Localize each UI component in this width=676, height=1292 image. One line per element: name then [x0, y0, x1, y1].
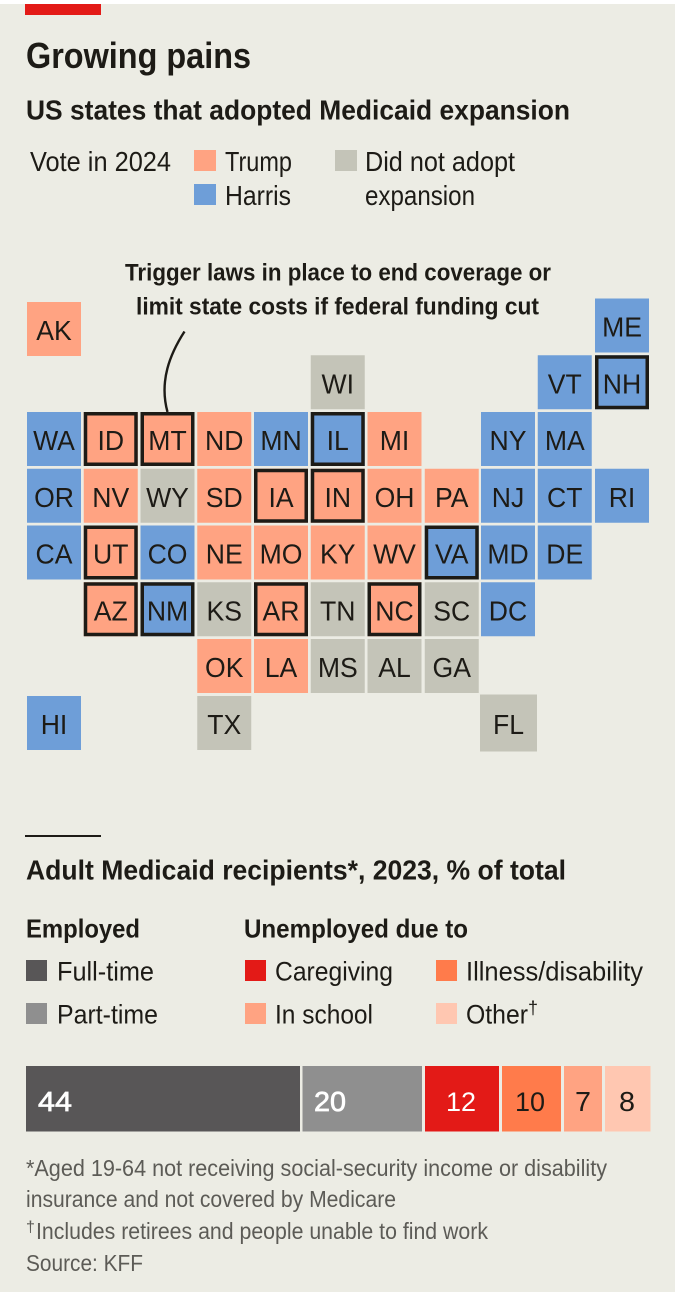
state: MN: MN	[260, 424, 302, 456]
state: DC: DC	[489, 595, 527, 626]
state: MN	[254, 412, 308, 466]
footnotes and source: insurance and not covered by Medicare	[26, 1186, 396, 1212]
state: MD: MD	[487, 538, 529, 570]
legend: unemployed due to: Unemployed due to	[244, 914, 468, 944]
state: UT: UT	[93, 538, 129, 570]
state: SC: SC	[433, 595, 470, 626]
state: NC	[368, 582, 422, 636]
state: PA: PA	[435, 481, 469, 513]
state: MS: MS	[318, 651, 358, 683]
state: FL	[480, 694, 537, 752]
state: IN	[311, 469, 365, 523]
state: MO: MO	[260, 538, 302, 570]
state: ME	[595, 298, 649, 352]
state: HI: HI	[41, 708, 67, 740]
state: RI: RI	[609, 481, 635, 513]
legend: employed: Full-time	[57, 956, 154, 986]
state: LA: LA	[265, 651, 298, 683]
state: NV: NV	[92, 481, 130, 513]
segment: caregiving 12: 12	[446, 1087, 476, 1117]
state: MO	[254, 526, 308, 580]
state: ID: ID	[97, 424, 124, 456]
segment: caregiving 12	[425, 1066, 499, 1132]
state: KY: KY	[320, 538, 355, 570]
state: NY	[481, 412, 535, 466]
state: DC	[481, 582, 535, 636]
footnotes and source: Includes retirees and people unable to find work	[36, 1218, 488, 1244]
state: WI: WI	[322, 368, 354, 399]
annotation leader line	[165, 332, 184, 412]
segment: illness 10: 10	[515, 1087, 545, 1117]
state: IL	[311, 412, 365, 466]
state: SC	[425, 582, 479, 636]
state: MA: MA	[545, 424, 585, 456]
state: RI	[595, 469, 649, 523]
state: WI	[311, 355, 365, 409]
footnotes and source: Source: KFF	[26, 1250, 143, 1276]
state: CO	[140, 526, 194, 580]
state: ND: ND	[205, 424, 243, 456]
state: OH: OH	[375, 481, 414, 513]
segment: other 8	[605, 1066, 650, 1132]
legend: employed	[26, 914, 158, 1030]
state: NV	[84, 469, 138, 523]
state: ID	[84, 412, 138, 466]
state: CA	[27, 526, 81, 580]
legend: unemployed due to: In school	[275, 1000, 373, 1030]
state: OK: OK	[205, 651, 243, 683]
state: CT	[538, 469, 592, 523]
legend: unemployed due to: Other	[466, 1000, 528, 1030]
legend: employed: Part-time	[57, 1000, 158, 1030]
state: TN	[311, 582, 365, 636]
legend: vote in 2024: Did not adopt	[365, 146, 515, 177]
state: MT	[140, 412, 194, 466]
state: GA	[425, 639, 479, 693]
red tab	[25, 4, 101, 15]
state: KS	[197, 582, 251, 636]
state: OR: OR	[34, 481, 74, 513]
state: AK: AK	[36, 314, 72, 346]
segment: in school 7	[564, 1066, 602, 1132]
segment: in school 7: 7	[575, 1086, 591, 1117]
state: FL: FL	[493, 708, 524, 740]
state: MI: MI	[380, 424, 409, 456]
annotation: trigger laws: limit state costs if federal funding cut	[136, 294, 539, 320]
legend: vote in 2024: Harris	[225, 180, 291, 211]
footnotes and source	[26, 1155, 607, 1276]
legend: vote in 2024: expansion	[365, 180, 475, 211]
state: VT: VT	[548, 368, 582, 399]
state: NH	[595, 355, 649, 409]
state: NM	[140, 582, 194, 636]
state: OK	[197, 639, 251, 693]
tile map of US states	[27, 298, 649, 752]
state: NH: NH	[603, 368, 641, 399]
state: WA	[27, 412, 81, 466]
state: IA: IA	[268, 481, 294, 513]
state: AL: AL	[378, 651, 411, 683]
state: HI	[27, 696, 81, 750]
state: WY	[140, 469, 194, 523]
footnotes and source: †	[26, 1219, 35, 1236]
state: NE	[197, 526, 251, 580]
segment: other 8: 8	[619, 1086, 635, 1117]
state: NY: NY	[490, 424, 526, 456]
second chart heading: Adult Medicaid recipients*, 2023, % of total	[26, 854, 566, 886]
state: DE	[538, 526, 592, 580]
legend: employed: Employed	[26, 914, 140, 944]
legend: unemployed due to: Caregiving	[275, 956, 393, 986]
state: SD: SD	[206, 481, 243, 513]
subtitle: US states that adopted Medicaid expansion	[26, 94, 570, 126]
legend: unemployed due to: †	[528, 998, 538, 1018]
state: ME: ME	[602, 311, 642, 343]
state: VT	[538, 355, 592, 409]
state: WA: WA	[33, 424, 76, 456]
stacked bar chart	[26, 1066, 650, 1132]
footnotes and source: *Aged 19-64 not receiving social-security income or disability	[26, 1155, 607, 1181]
state: AK	[27, 302, 81, 356]
state: NM: NM	[147, 595, 188, 626]
state: SD	[197, 469, 251, 523]
state: DE: DE	[546, 538, 583, 570]
state: MA	[538, 412, 592, 466]
state: WY: WY	[146, 481, 189, 513]
state: ND	[197, 412, 251, 466]
state: MI	[368, 412, 422, 466]
state: WV	[368, 526, 422, 580]
state: TN: TN	[320, 595, 355, 626]
state: LA	[254, 639, 308, 693]
state: MT: MT	[148, 424, 187, 456]
state: VA	[425, 526, 479, 580]
legend: vote in 2024: Vote in 2024	[30, 146, 171, 177]
segment: illness 10	[502, 1066, 561, 1132]
annotation: trigger laws: Trigger laws in place to end coverage or	[125, 260, 551, 286]
state: KS: KS	[207, 595, 242, 626]
state: MS	[311, 639, 365, 693]
state: IL: IL	[327, 424, 349, 456]
state: IA	[254, 469, 308, 523]
state: NE: NE	[206, 538, 243, 570]
segment: full-time 44: 44	[38, 1086, 72, 1117]
state: GA: GA	[433, 651, 472, 683]
state: NC: NC	[375, 595, 414, 626]
segment: full-time 44	[26, 1066, 300, 1132]
state: AZ: AZ	[94, 595, 128, 626]
annotation: trigger laws	[125, 260, 551, 320]
state: CA: CA	[36, 538, 73, 570]
state: KY	[311, 526, 365, 580]
segment: part-time 20	[302, 1066, 422, 1132]
state: AL	[368, 639, 422, 693]
state: VA: VA	[435, 538, 469, 570]
state: AR	[254, 582, 308, 636]
state: PA	[425, 469, 479, 523]
segment: part-time 20: 20	[314, 1086, 346, 1117]
legend: unemployed due to	[244, 914, 643, 1030]
state: MD	[481, 526, 535, 580]
title: Growing pains	[26, 35, 251, 76]
legend: vote in 2024: Trump	[225, 146, 292, 177]
legend: vote in 2024	[30, 146, 515, 211]
state: AR: AR	[263, 595, 299, 626]
state: CT: CT	[547, 481, 583, 513]
state: WV: WV	[373, 538, 417, 570]
state: CO: CO	[148, 538, 187, 570]
state: TX: TX	[207, 708, 241, 740]
state: NJ	[481, 469, 535, 523]
state: UT	[84, 526, 138, 580]
state: NJ: NJ	[492, 481, 524, 513]
state: OR	[27, 469, 81, 523]
state: OH	[368, 469, 422, 523]
state: TX	[197, 696, 251, 750]
legend: unemployed due to: Illness/disability	[466, 956, 643, 986]
state: AZ	[84, 582, 138, 636]
state: IN: IN	[324, 481, 351, 513]
